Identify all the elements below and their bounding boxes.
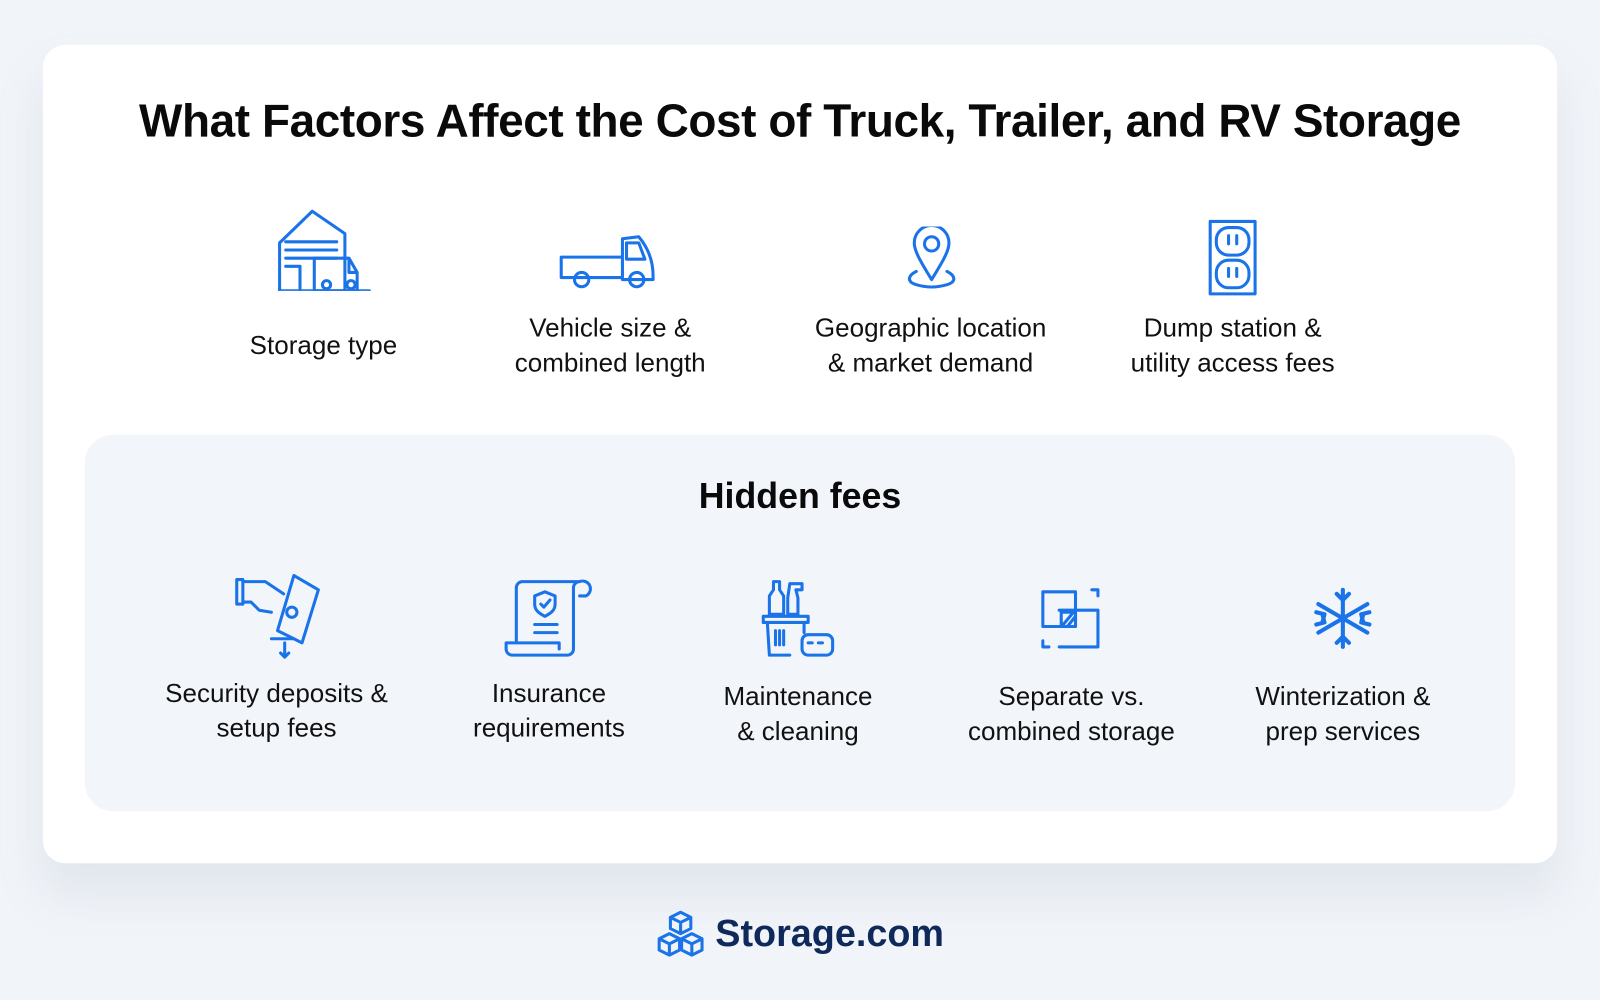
icon: storage building xyxy=(278,210,371,291)
label: separate vs combined: Separate vs. xyxy=(998,683,1144,711)
label: dump station xyxy=(1131,314,1335,378)
icon: truck xyxy=(560,235,655,288)
label: insurance xyxy=(473,680,625,743)
label: storage type: Storage type xyxy=(250,332,397,360)
label: security deposits: Security deposits & xyxy=(165,680,388,708)
icon: deposit hand xyxy=(235,574,320,659)
label: vehicle size: Vehicle size & xyxy=(529,314,691,343)
icon: cleaning xyxy=(762,580,834,657)
panel: hidden fees xyxy=(85,435,1515,811)
label: separate vs combined xyxy=(968,683,1175,746)
icon: snowflake xyxy=(1314,588,1372,649)
label: winterization: prep services xyxy=(1265,717,1420,746)
heading: hidden fees: Hidden fees xyxy=(699,477,901,516)
label: insurance: requirements xyxy=(473,714,625,743)
label: winterization: Winterization & xyxy=(1255,683,1430,711)
label: geographic xyxy=(815,314,1046,378)
label: winterization xyxy=(1255,683,1430,746)
title: What Factors Affect the Cost of Truck, Trailer, and RV Storage xyxy=(139,95,1461,147)
label: maintenance xyxy=(723,683,872,746)
label: security deposits: setup fees xyxy=(216,714,337,743)
icon: location pin xyxy=(908,226,956,288)
label: separate vs combined: combined storage xyxy=(968,717,1175,746)
icon: insurance scroll xyxy=(504,580,592,657)
logo: Storage.com xyxy=(715,912,944,954)
label: maintenance: & cleaning xyxy=(737,717,859,746)
card xyxy=(43,45,1557,863)
label: vehicle size: combined length xyxy=(515,349,706,378)
label: dump station: Dump station & xyxy=(1144,314,1322,343)
label: geographic: & market demand xyxy=(828,349,1033,378)
label: maintenance: Maintenance xyxy=(723,683,872,711)
label: geographic: Geographic location xyxy=(815,314,1046,343)
icon: separate vs combined xyxy=(1041,588,1100,648)
label: insurance: Insurance xyxy=(492,680,606,708)
label: security deposits xyxy=(165,680,388,743)
label: vehicle size xyxy=(515,314,706,378)
icon: outlet xyxy=(1208,220,1257,296)
label: dump station: utility access fees xyxy=(1131,349,1335,378)
